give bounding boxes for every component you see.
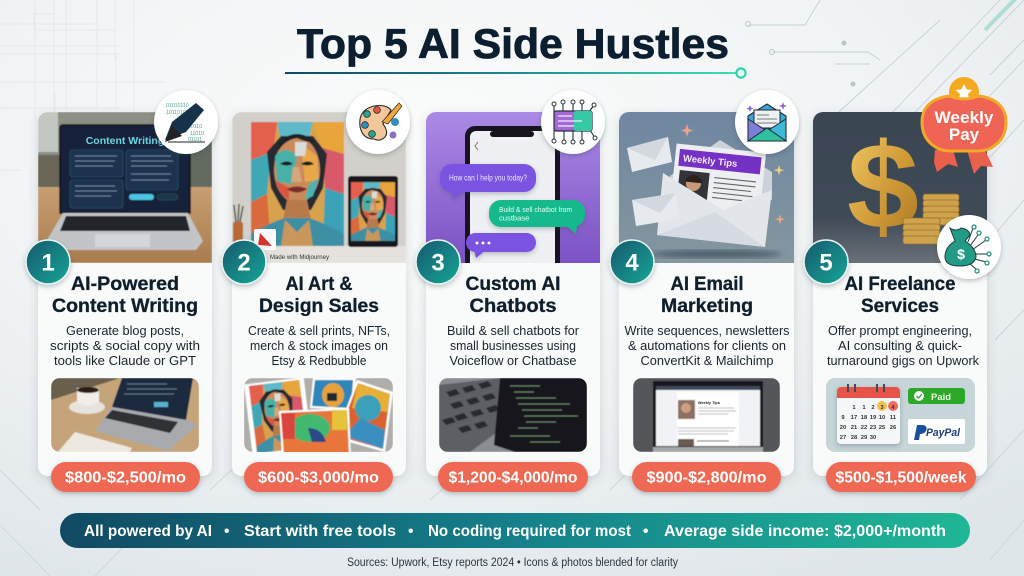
heading: Marketing	[661, 295, 753, 317]
income pill	[438, 462, 588, 492]
photo: phone with chat bubbles	[426, 112, 600, 276]
card panel	[619, 112, 794, 476]
badge: Weekly Pay: Pay	[949, 125, 980, 144]
badge body	[922, 96, 1006, 151]
calendar: 1	[852, 405, 856, 411]
calendar: 28	[851, 435, 858, 441]
icon: circuit chat	[541, 90, 605, 154]
chat bubble: answer: Build & sell chatbot from	[499, 205, 572, 214]
description	[248, 324, 390, 368]
icon: fountain pen: 01010110	[166, 103, 189, 109]
income pill: $1,200-$4,000/mo	[448, 470, 578, 486]
description	[624, 324, 790, 368]
summary bar: •	[643, 523, 648, 540]
income pill: $800-$2,500/mo	[65, 470, 186, 486]
summary bar: •	[224, 523, 229, 540]
description: turnaround gigs on Upwork	[827, 354, 980, 368]
summary bar: Average side income: $2,000+/month	[664, 523, 946, 540]
income pill: $500-$1,500/week	[836, 470, 967, 486]
card panel	[813, 112, 987, 476]
heading: Chatbots	[470, 295, 557, 317]
paid tag: Paid	[931, 392, 951, 403]
badge: Weekly Pay: Weekly	[934, 108, 994, 127]
description: merch & stock images on	[250, 339, 388, 353]
number badge 2: 2	[237, 250, 251, 276]
calendar: 29	[861, 435, 868, 441]
icon: fountain pen: 10110	[188, 124, 202, 130]
income pill	[826, 462, 976, 492]
calendar: 9	[841, 415, 845, 421]
heading	[844, 273, 956, 317]
heading: AI Email	[670, 273, 744, 295]
income pill	[51, 462, 200, 492]
small envelope top	[627, 137, 672, 172]
number badge 3: 3	[431, 250, 445, 276]
photo: envelope with newsletter	[619, 112, 794, 263]
thumbnail: newsletter on monitor	[633, 378, 780, 452]
photo: laptop on desk	[38, 112, 212, 263]
description: & automations for clients on	[628, 339, 786, 353]
number badge 4: 4	[625, 250, 639, 276]
calendar: 3	[880, 405, 884, 411]
thumbnail: newsletter on monitor: Weekly Tips	[698, 401, 720, 405]
heading: AI Art &	[286, 273, 352, 295]
heading: Custom AI	[466, 273, 560, 295]
icon: fountain pen: 10110101	[166, 110, 189, 116]
envelope front pocket	[657, 173, 772, 247]
thumbnail: calendar, paid and PayPal	[826, 378, 975, 452]
chat bubble: answer	[489, 200, 585, 234]
income pill	[244, 462, 393, 492]
card panel	[38, 112, 212, 476]
income pill: $600-$3,000/mo	[258, 470, 379, 486]
description	[50, 324, 200, 368]
icon: painter's palette	[346, 90, 410, 154]
description	[447, 324, 579, 368]
summary bar: All powered by AI	[84, 523, 212, 540]
title: Top 5 AI Side Hustles	[297, 20, 729, 67]
badge: Weekly Pay	[922, 77, 1006, 174]
heading	[52, 273, 198, 317]
newsletter sheet: Weekly Tips	[682, 153, 738, 170]
card 2: AI Art & Design Sales	[222, 90, 410, 492]
icon: fountain pen: 11010	[190, 131, 204, 137]
photo: laptop on desk: Content Writing	[86, 135, 164, 147]
summary bar: No coding required for most	[428, 523, 631, 540]
description: Write sequences, newsletters	[624, 324, 790, 338]
card 5: AI Freelance Services	[804, 77, 1006, 492]
icon: fountain pen	[154, 90, 218, 154]
calendar: 20	[840, 425, 846, 431]
heading: AI Freelance	[844, 273, 956, 295]
coin stacks	[903, 194, 959, 244]
PayPal tag: PayPal	[926, 427, 961, 439]
description: small businesses using	[450, 339, 576, 353]
photo: gold dollar and coins	[813, 112, 987, 263]
icon: open envelope	[735, 90, 799, 154]
PayPal tag	[908, 419, 965, 444]
ribbons	[934, 150, 993, 174]
description: scripts & social copy with	[50, 339, 200, 353]
calendar: 21	[851, 425, 858, 431]
newsletter sheet	[673, 144, 766, 210]
title underline with node	[285, 68, 746, 78]
description: Create & sell prints, NFTs,	[248, 324, 390, 338]
card 4: AI Email Marketing	[610, 90, 799, 492]
summary bar	[60, 513, 970, 548]
number badge 1: 1	[41, 250, 55, 276]
summary bar: •	[408, 523, 413, 540]
heading	[661, 273, 753, 317]
number badge 2	[222, 240, 266, 284]
calendar: 17	[851, 415, 857, 421]
number badge 1	[26, 240, 70, 284]
calendar: 1	[862, 405, 866, 411]
thumbnail: desk with coffee	[51, 378, 199, 452]
photo: painted portrait and tablet	[232, 112, 406, 263]
card panel	[426, 112, 600, 476]
income pill: $900-$2,800/mo	[646, 470, 766, 486]
calendar: 18	[861, 415, 868, 421]
icon: money bag circuit: $	[957, 246, 965, 262]
card panel	[232, 112, 406, 476]
thumbnail: art print collage	[244, 377, 393, 456]
heading	[466, 273, 560, 317]
description: tools like Claude or GPT	[54, 354, 196, 368]
calendar: 25	[879, 425, 886, 431]
number badge 5: 5	[819, 250, 833, 276]
calendar: 19	[870, 415, 877, 421]
chat bubble: typing	[466, 233, 536, 258]
heading: AI-Powered	[71, 273, 179, 295]
description: Generate blog posts,	[66, 324, 184, 338]
Midjourney logo tile	[254, 229, 276, 250]
sources note: Sources: Upwork, Etsy reports 2024 • Icons & photos blended for clarity	[347, 557, 678, 569]
description: ConvertKit & Mailchimp	[640, 354, 774, 368]
chat bubble: answer: custbase	[499, 214, 529, 222]
calendar: 4	[891, 405, 895, 411]
icon: fountain pen: 01101	[188, 137, 202, 143]
description: Offer prompt engineering,	[828, 324, 972, 338]
icon: money bag circuit	[937, 215, 1001, 279]
heading: Services	[861, 295, 939, 317]
calendar: 26	[890, 425, 897, 431]
description: Voiceflow or Chatbase	[450, 354, 576, 368]
calendar: 11	[890, 415, 897, 421]
star medal	[949, 77, 979, 107]
heading	[259, 273, 379, 317]
calendar	[837, 384, 900, 444]
summary bar: Start with free tools	[244, 523, 396, 540]
heading: Design Sales	[259, 295, 379, 317]
chat bubble: question: How can I help you today?	[449, 172, 527, 182]
calendar: 30	[870, 435, 876, 441]
photo: painted portrait and tablet: Made with Midjourney	[270, 255, 329, 261]
description: Build & sell chatbots for	[447, 324, 579, 338]
number badge 3	[416, 240, 460, 284]
icon: fountain pen: 011010	[178, 117, 195, 123]
thumbnail: keyboard and code screen	[439, 378, 587, 452]
number badge 5	[804, 240, 848, 284]
description	[827, 324, 980, 368]
envelope back flap	[670, 140, 772, 200]
description: Etsy & Redbubble	[272, 354, 366, 368]
calendar: 27	[840, 435, 846, 441]
income pill	[632, 462, 781, 492]
calendar: 2	[871, 405, 875, 411]
calendar: 22	[861, 425, 867, 431]
calendar: 10	[879, 415, 885, 421]
number badge 4	[610, 240, 654, 284]
card 3: Custom AI Chatbots	[416, 90, 605, 492]
heading: Content Writing	[52, 295, 198, 317]
calendar: 23	[870, 425, 877, 431]
card 1: AI-Powered Content Writing	[26, 90, 218, 492]
chat bubble: question	[440, 164, 536, 199]
paid tag	[908, 388, 965, 404]
description: AI consulting & quick-	[838, 339, 962, 353]
small envelope bottom	[632, 195, 661, 226]
photo: gold dollar and coins: $	[847, 118, 919, 254]
